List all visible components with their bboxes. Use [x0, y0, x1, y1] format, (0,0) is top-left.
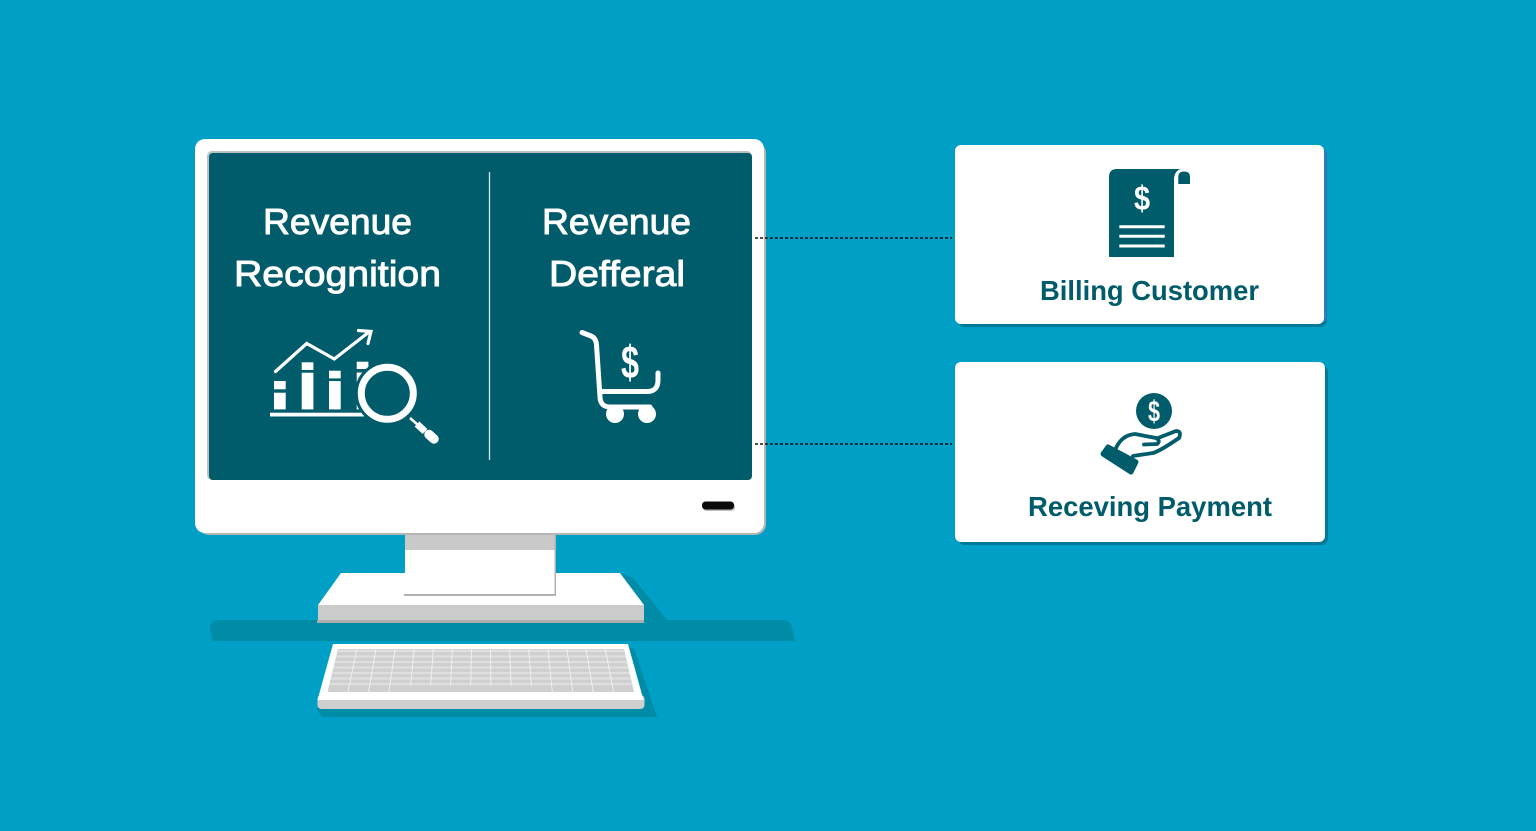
- panel: billing customer: [955, 145, 1327, 327]
- screen: [207, 151, 752, 480]
- icon: shopping cart with dollar: $: [621, 336, 639, 388]
- desktop computer: [195, 139, 795, 717]
- monitor: [195, 139, 766, 535]
- panel: receiving payment: [955, 362, 1328, 545]
- heading: revenue recognition: Revenue: [263, 201, 412, 242]
- icon: chart with magnifier: [270, 330, 434, 439]
- bars: [270, 362, 368, 416]
- heading: revenue recognition: Recognition: [234, 253, 441, 294]
- keyboard shadow: [316, 648, 657, 717]
- magnifier: [357, 363, 417, 423]
- label: Billing Customer: [1040, 275, 1259, 306]
- monitor stand: [317, 534, 644, 623]
- desk shadow: [210, 620, 795, 641]
- icon: hand with coin: [1103, 393, 1180, 472]
- icon: bill document: $: [1134, 179, 1150, 218]
- heading: revenue defferal: Defferal: [549, 253, 685, 294]
- label: Receving Payment: [1028, 491, 1272, 522]
- divider on screen: [488, 172, 490, 460]
- heading: revenue defferal: [542, 201, 691, 294]
- stand base shadow: [620, 573, 668, 621]
- power button: [702, 502, 735, 511]
- heading: revenue recognition: [234, 201, 441, 294]
- keyboard: [318, 644, 644, 709]
- icon: hand with coin: $: [1148, 394, 1160, 428]
- trend arrow: [276, 330, 371, 372]
- icon: bill document: [1109, 169, 1190, 257]
- heading: revenue defferal: Revenue: [542, 201, 691, 242]
- icon: shopping cart with dollar: [582, 332, 658, 423]
- connector lines: [755, 238, 952, 444]
- keys: [328, 648, 634, 692]
